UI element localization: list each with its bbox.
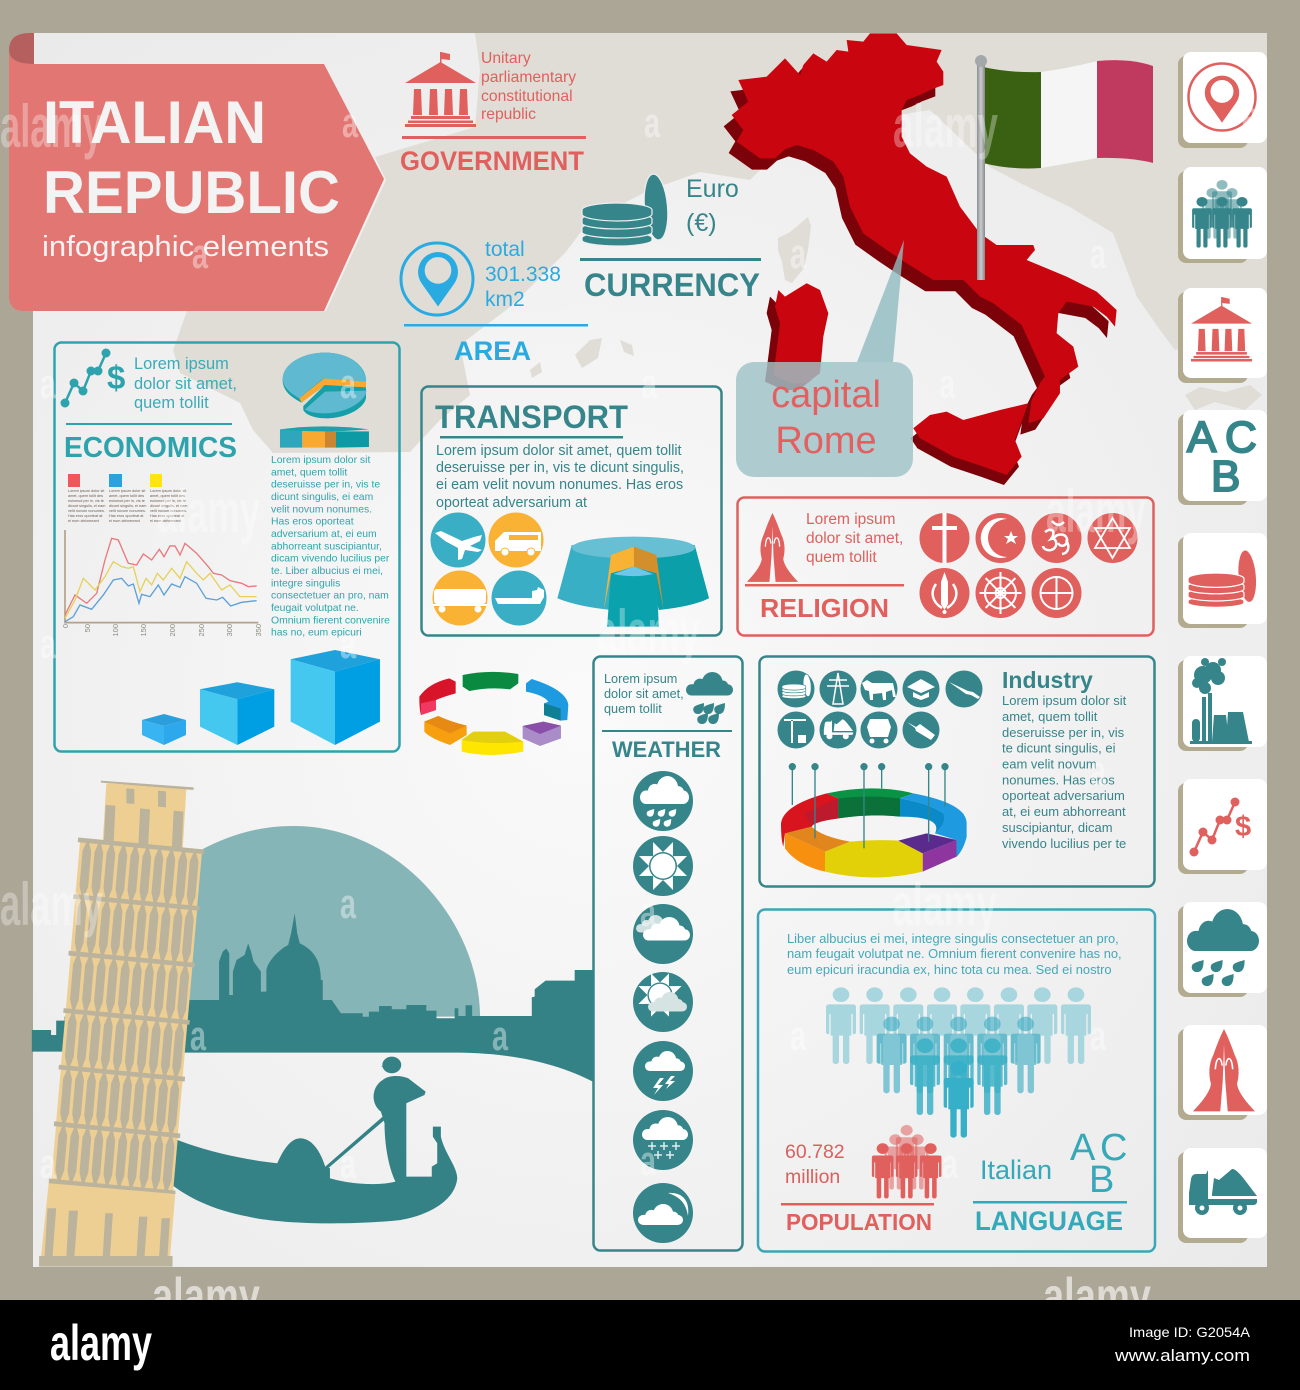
image id: Image ID: G2054A	[1129, 1324, 1251, 1340]
capital text: Rome	[775, 420, 877, 462]
icon: tanker train	[432, 570, 488, 626]
black credit bar	[0, 1300, 1300, 1390]
sidebar tile: location	[1178, 52, 1267, 148]
sidebar tile: currency	[1178, 533, 1267, 628]
flag on pole	[975, 55, 1153, 280]
sidebar tile: economics	[1178, 779, 1267, 874]
icon: growth chart with dollar	[60, 348, 125, 408]
icon: power pylon	[820, 670, 856, 708]
intro text: dolor sit amet,	[134, 375, 237, 393]
Sardinia	[773, 283, 828, 383]
icon: khanda	[920, 568, 970, 618]
pie chart	[283, 353, 367, 418]
icon: dharma wheel	[976, 568, 1026, 618]
chart legend: ei eum abhorreant	[68, 519, 100, 523]
chart legend: ei eum abhorreant	[109, 519, 141, 523]
stock watermarks: a	[340, 1140, 356, 1187]
icon: ship	[492, 570, 546, 626]
leaning tower of Pisa	[39, 781, 204, 1267]
icon: people group	[872, 1125, 941, 1199]
icon: rain cloud	[686, 672, 733, 724]
illustration: Italian landmarks	[32, 781, 593, 1267]
flag pole	[977, 62, 985, 280]
economics body text: integre singulis	[271, 578, 340, 589]
population text: nam feugait volutpat ne. Omnium fierent convenire has no,	[787, 946, 1122, 961]
subtitle: infographic elements	[42, 231, 329, 263]
area block	[401, 238, 588, 366]
area value: 301.338	[485, 263, 561, 286]
pie chunk chart	[557, 537, 709, 627]
chart legend: ei eum abhorreant	[150, 519, 182, 523]
industry text: oporteat adversarium	[1002, 788, 1125, 803]
population text: Liber albucius ei mei, integre singulis consectetuer an pro,	[787, 931, 1119, 946]
icon: cow	[860, 670, 898, 708]
line chart: 250	[197, 624, 206, 637]
icon: letters ABC: C	[1100, 1127, 1127, 1169]
transport text: ei eam velit novum nonumes. Has eros	[436, 477, 683, 493]
3D cube bars	[142, 650, 380, 745]
line chart: 150	[139, 624, 148, 637]
icon: praying hands	[747, 513, 798, 582]
stock watermarks: alamy	[0, 93, 103, 160]
religion text: Lorem ipsum	[806, 511, 896, 528]
economics body text: Has eros oporteat	[271, 517, 354, 528]
map shadow	[724, 45, 1109, 485]
line chart: 300	[225, 624, 234, 637]
pole ball	[975, 55, 987, 67]
icon: cross	[920, 513, 970, 563]
grey background map of the Mediterranean	[173, 33, 1267, 453]
currency block	[580, 173, 761, 303]
currency name: (€)	[686, 209, 717, 237]
industry text: suscipiantur, dicam	[1002, 820, 1113, 835]
stock watermarks: alamy	[1046, 478, 1146, 545]
chart legend: dicunt singulis, ei eam	[150, 504, 187, 508]
sidebar tile: language	[1178, 410, 1267, 505]
transport text: Lorem ipsum dolor sit amet, quem tollit	[436, 443, 682, 459]
sidebar tile: language: A	[1187, 413, 1217, 462]
population text: eum epicuri iracundia ex, hinc tota cu mea. Sed ei nostro	[787, 962, 1112, 977]
sidebar tile: industry	[1178, 656, 1267, 751]
economics body text: amet, quem tollit	[271, 467, 347, 478]
stock watermarks: alamy	[1043, 1268, 1151, 1324]
chart legend: Has eros oporteat at	[150, 514, 185, 518]
chart legend: dicunt singulis, ei eam	[109, 504, 146, 508]
icon: circled cross	[1032, 568, 1082, 618]
flag white band	[1041, 61, 1097, 168]
area value: km2	[485, 288, 525, 311]
stock watermarks: a	[939, 360, 955, 407]
pictogram of people	[826, 987, 1091, 1138]
chart legend	[68, 474, 187, 523]
chart legend: velit novum nonumes.	[109, 509, 146, 513]
stock watermarks: a	[190, 1012, 206, 1059]
icon: van	[488, 512, 544, 568]
icon: cloud and moon	[633, 1183, 693, 1243]
mainland Italy	[732, 33, 1117, 423]
icon: growth chart with dollar: $	[107, 359, 125, 396]
industry text: nonumes. Has eros	[1002, 772, 1115, 788]
stock watermarks: a	[790, 230, 806, 277]
chart legend: dicunt singulis, ei eam	[68, 504, 105, 508]
weather text: dolor sit amet,	[604, 687, 684, 701]
ribbon body	[9, 50, 384, 311]
economics body text: dicunt singulis, ei eam	[271, 492, 373, 503]
city skyline	[32, 913, 593, 1082]
chart legend: amet, quem tollit des	[150, 494, 185, 498]
government description: Unitary	[481, 50, 531, 67]
icon: letters ABC	[1070, 1127, 1127, 1201]
icon: location pin	[401, 243, 473, 315]
icon: mine cart	[860, 712, 898, 748]
stock watermarks: alamy	[597, 598, 700, 665]
icon: coins	[582, 173, 670, 246]
icon: sun behind cloud	[633, 972, 693, 1032]
government description: parliamentary	[481, 69, 576, 86]
weather text: quem tollit	[604, 702, 662, 716]
icon: dump truck	[820, 712, 856, 748]
capital text: capital	[771, 374, 881, 416]
stock watermarks: a	[1090, 1012, 1106, 1059]
chart legend: Lorem ipsum dolor sit	[150, 489, 187, 493]
weather heading: WEATHER	[612, 737, 721, 762]
ribbon fold	[9, 33, 34, 64]
stock watermarks: a	[340, 880, 356, 927]
transport heading: TRANSPORT	[435, 399, 628, 435]
sidebar tile: natural resources	[1178, 1148, 1267, 1243]
stock watermarks: alamy	[0, 871, 103, 938]
stock watermarks: a	[340, 620, 356, 667]
icon: syringe	[902, 712, 940, 748]
title line 2: REPUBLIC	[43, 159, 340, 226]
chart legend: euismod per in, vis te	[68, 499, 104, 503]
icon: sun	[633, 836, 693, 896]
economics body text: abhorreant suscipiantur,	[271, 541, 382, 552]
economics body text: feugait volutpat ne.	[271, 603, 359, 614]
government description: constitutional	[481, 88, 573, 105]
icon: rain	[633, 771, 693, 831]
icon: government building	[405, 52, 476, 127]
icon: airplane	[430, 512, 486, 568]
industry text: Lorem ipsum dolor sit	[1002, 693, 1127, 708]
government description: republic	[481, 106, 536, 123]
economics body text: adversarium at, ei eum	[271, 529, 377, 540]
panel: economics	[54, 342, 400, 752]
stock watermarks: a	[640, 1137, 656, 1184]
stock watermarks: a	[340, 360, 356, 407]
economics body text: dicam vivendo lucilius per	[271, 554, 390, 565]
icon: clouds	[633, 904, 693, 964]
callout pointer	[857, 240, 904, 362]
weather text: Lorem ipsum	[604, 672, 677, 686]
area heading: AREA	[454, 336, 531, 366]
icon: snow	[633, 1110, 693, 1170]
panel: industry	[760, 656, 1154, 886]
industry heading: Industry	[1002, 667, 1093, 693]
line chart: 100	[111, 624, 120, 637]
alamy logo: alamy	[50, 1315, 152, 1371]
sidebar tile: weather	[1178, 902, 1267, 997]
panel: population and language	[758, 910, 1155, 1252]
icon: rifle	[946, 670, 982, 708]
industry text: vivendo lucilius per te	[1002, 836, 1126, 851]
flag green band	[983, 67, 1041, 168]
stock watermarks: a	[1090, 230, 1106, 277]
religion text: dolor sit amet,	[806, 530, 903, 547]
chart legend: amet, quem tollit des	[109, 494, 144, 498]
currency name: Euro	[686, 175, 739, 203]
sidebar tile: population	[1178, 167, 1267, 263]
stock watermarks: a	[492, 1012, 508, 1059]
chart legend: euismod per in, vis te	[150, 499, 186, 503]
industry text: te dicunt singulis, ei	[1002, 740, 1116, 756]
icon: letters ABC: A	[1070, 1127, 1096, 1169]
stock watermarks: alamy	[892, 871, 997, 938]
population value: million	[785, 1166, 840, 1188]
icon: om	[1032, 513, 1082, 563]
industry text: amet, quem tollit	[1002, 709, 1098, 724]
title: ITALIAN	[43, 89, 266, 156]
economics body text: velit novum nonumes.	[271, 504, 372, 515]
stock watermarks: a	[1090, 747, 1106, 794]
stock watermarks: a	[644, 99, 660, 146]
line chart: 0	[61, 624, 70, 628]
stock watermarks: a	[790, 1012, 806, 1059]
stock watermarks: a	[942, 1140, 958, 1187]
chart legend: Lorem ipsum dolor sit	[68, 489, 105, 493]
chart legend: Has eros oporteat at	[109, 514, 144, 518]
icon: coins	[778, 670, 814, 708]
flag red band	[1097, 60, 1153, 163]
economics body text: te. Liber albucius ei mei,	[271, 566, 383, 577]
panel: religion	[738, 498, 1154, 636]
stock watermarks: a	[40, 620, 56, 667]
gondolier	[325, 1057, 426, 1182]
sidebar tile: language: C	[1225, 413, 1257, 462]
website: www.alamy.com	[1114, 1346, 1250, 1365]
exploded ring chart	[419, 672, 568, 755]
chart legend: velit novum nonumes.	[68, 509, 105, 513]
3D ring chart	[781, 764, 967, 877]
government block	[400, 50, 586, 176]
icon: crescent and star	[976, 513, 1026, 563]
language heading: LANGUAGE	[975, 1206, 1123, 1236]
economics body text: consectetuer an pro, nam	[271, 591, 389, 602]
currency heading: CURRENCY	[584, 267, 760, 303]
gondola	[170, 1127, 457, 1223]
line chart: 350	[254, 624, 263, 637]
icon: construction crane	[778, 712, 814, 748]
chart legend: euismod per in, vis te	[109, 499, 145, 503]
sidebar tile: language: B	[1211, 452, 1240, 501]
stock watermarks: alamy	[152, 1268, 260, 1324]
chart legend: Lorem ipsum dolor sit	[109, 489, 146, 493]
sidebar tile: government	[1178, 288, 1267, 383]
chart legend: Has eros oporteat at	[68, 514, 103, 518]
stock watermarks: a	[641, 360, 657, 407]
sidebar tile: religion	[1178, 1025, 1267, 1120]
stock watermarks: a	[640, 888, 656, 935]
language value: Italian	[980, 1155, 1052, 1185]
title ribbon	[9, 33, 384, 311]
callout box	[736, 362, 913, 477]
economics body text: deseruisse per in, vis te	[271, 480, 380, 491]
sidebar tile: economics: $	[1235, 811, 1251, 843]
stock watermarks: alamy	[893, 93, 998, 160]
religion text: quem tollit	[806, 549, 877, 566]
intro text: quem tollit	[134, 394, 209, 412]
chart legend: velit novum nonumes.	[150, 509, 187, 513]
religion heading: RELIGION	[760, 593, 889, 623]
Sicily	[913, 403, 1028, 475]
population value: 60.782	[785, 1141, 845, 1163]
icon: thunderstorm	[633, 1041, 693, 1101]
stock watermarks: a	[40, 1140, 56, 1187]
icon: graduation cap	[902, 670, 940, 708]
government heading: GOVERNMENT	[400, 146, 584, 176]
map of Italy	[724, 33, 1117, 485]
economics body text: has no, eum epicuri	[271, 628, 362, 639]
economics body text: Omnium fierent convenire	[271, 615, 390, 626]
transport text: oporteat adversarium at	[436, 495, 587, 511]
industry text: at, ei eum abhorreant	[1002, 804, 1126, 819]
industry text: deseruisse per in, vis	[1002, 725, 1125, 740]
chart legend: amet, quem tollit des	[68, 494, 103, 498]
stock watermarks: a	[1242, 92, 1258, 139]
transport text: deseruisse per in, vis te dicunt singulis,	[436, 460, 684, 476]
icon: star of David	[1088, 513, 1138, 563]
area value: total	[485, 238, 525, 261]
capital callout	[736, 240, 913, 477]
sun disc	[183, 826, 480, 1017]
economics heading: ECONOMICS	[64, 432, 237, 464]
pie segment block	[280, 426, 369, 448]
stock watermarks: alamy	[157, 478, 260, 545]
stock watermarks: a	[192, 230, 208, 277]
industry text: eam velit novum	[1002, 756, 1097, 772]
intro text: Lorem ipsum	[134, 355, 229, 373]
population heading: POPULATION	[786, 1209, 932, 1235]
icon: letters ABC: B	[1089, 1159, 1114, 1201]
stock watermarks: a	[40, 360, 56, 407]
line chart	[61, 530, 263, 637]
stock watermarks: a	[342, 99, 358, 146]
panel: weather	[594, 656, 742, 1250]
panel: transport	[422, 386, 722, 636]
economics body text: Lorem ipsum dolor sit	[271, 455, 370, 466]
line chart: 200	[168, 624, 177, 637]
line chart: 50	[83, 624, 92, 632]
